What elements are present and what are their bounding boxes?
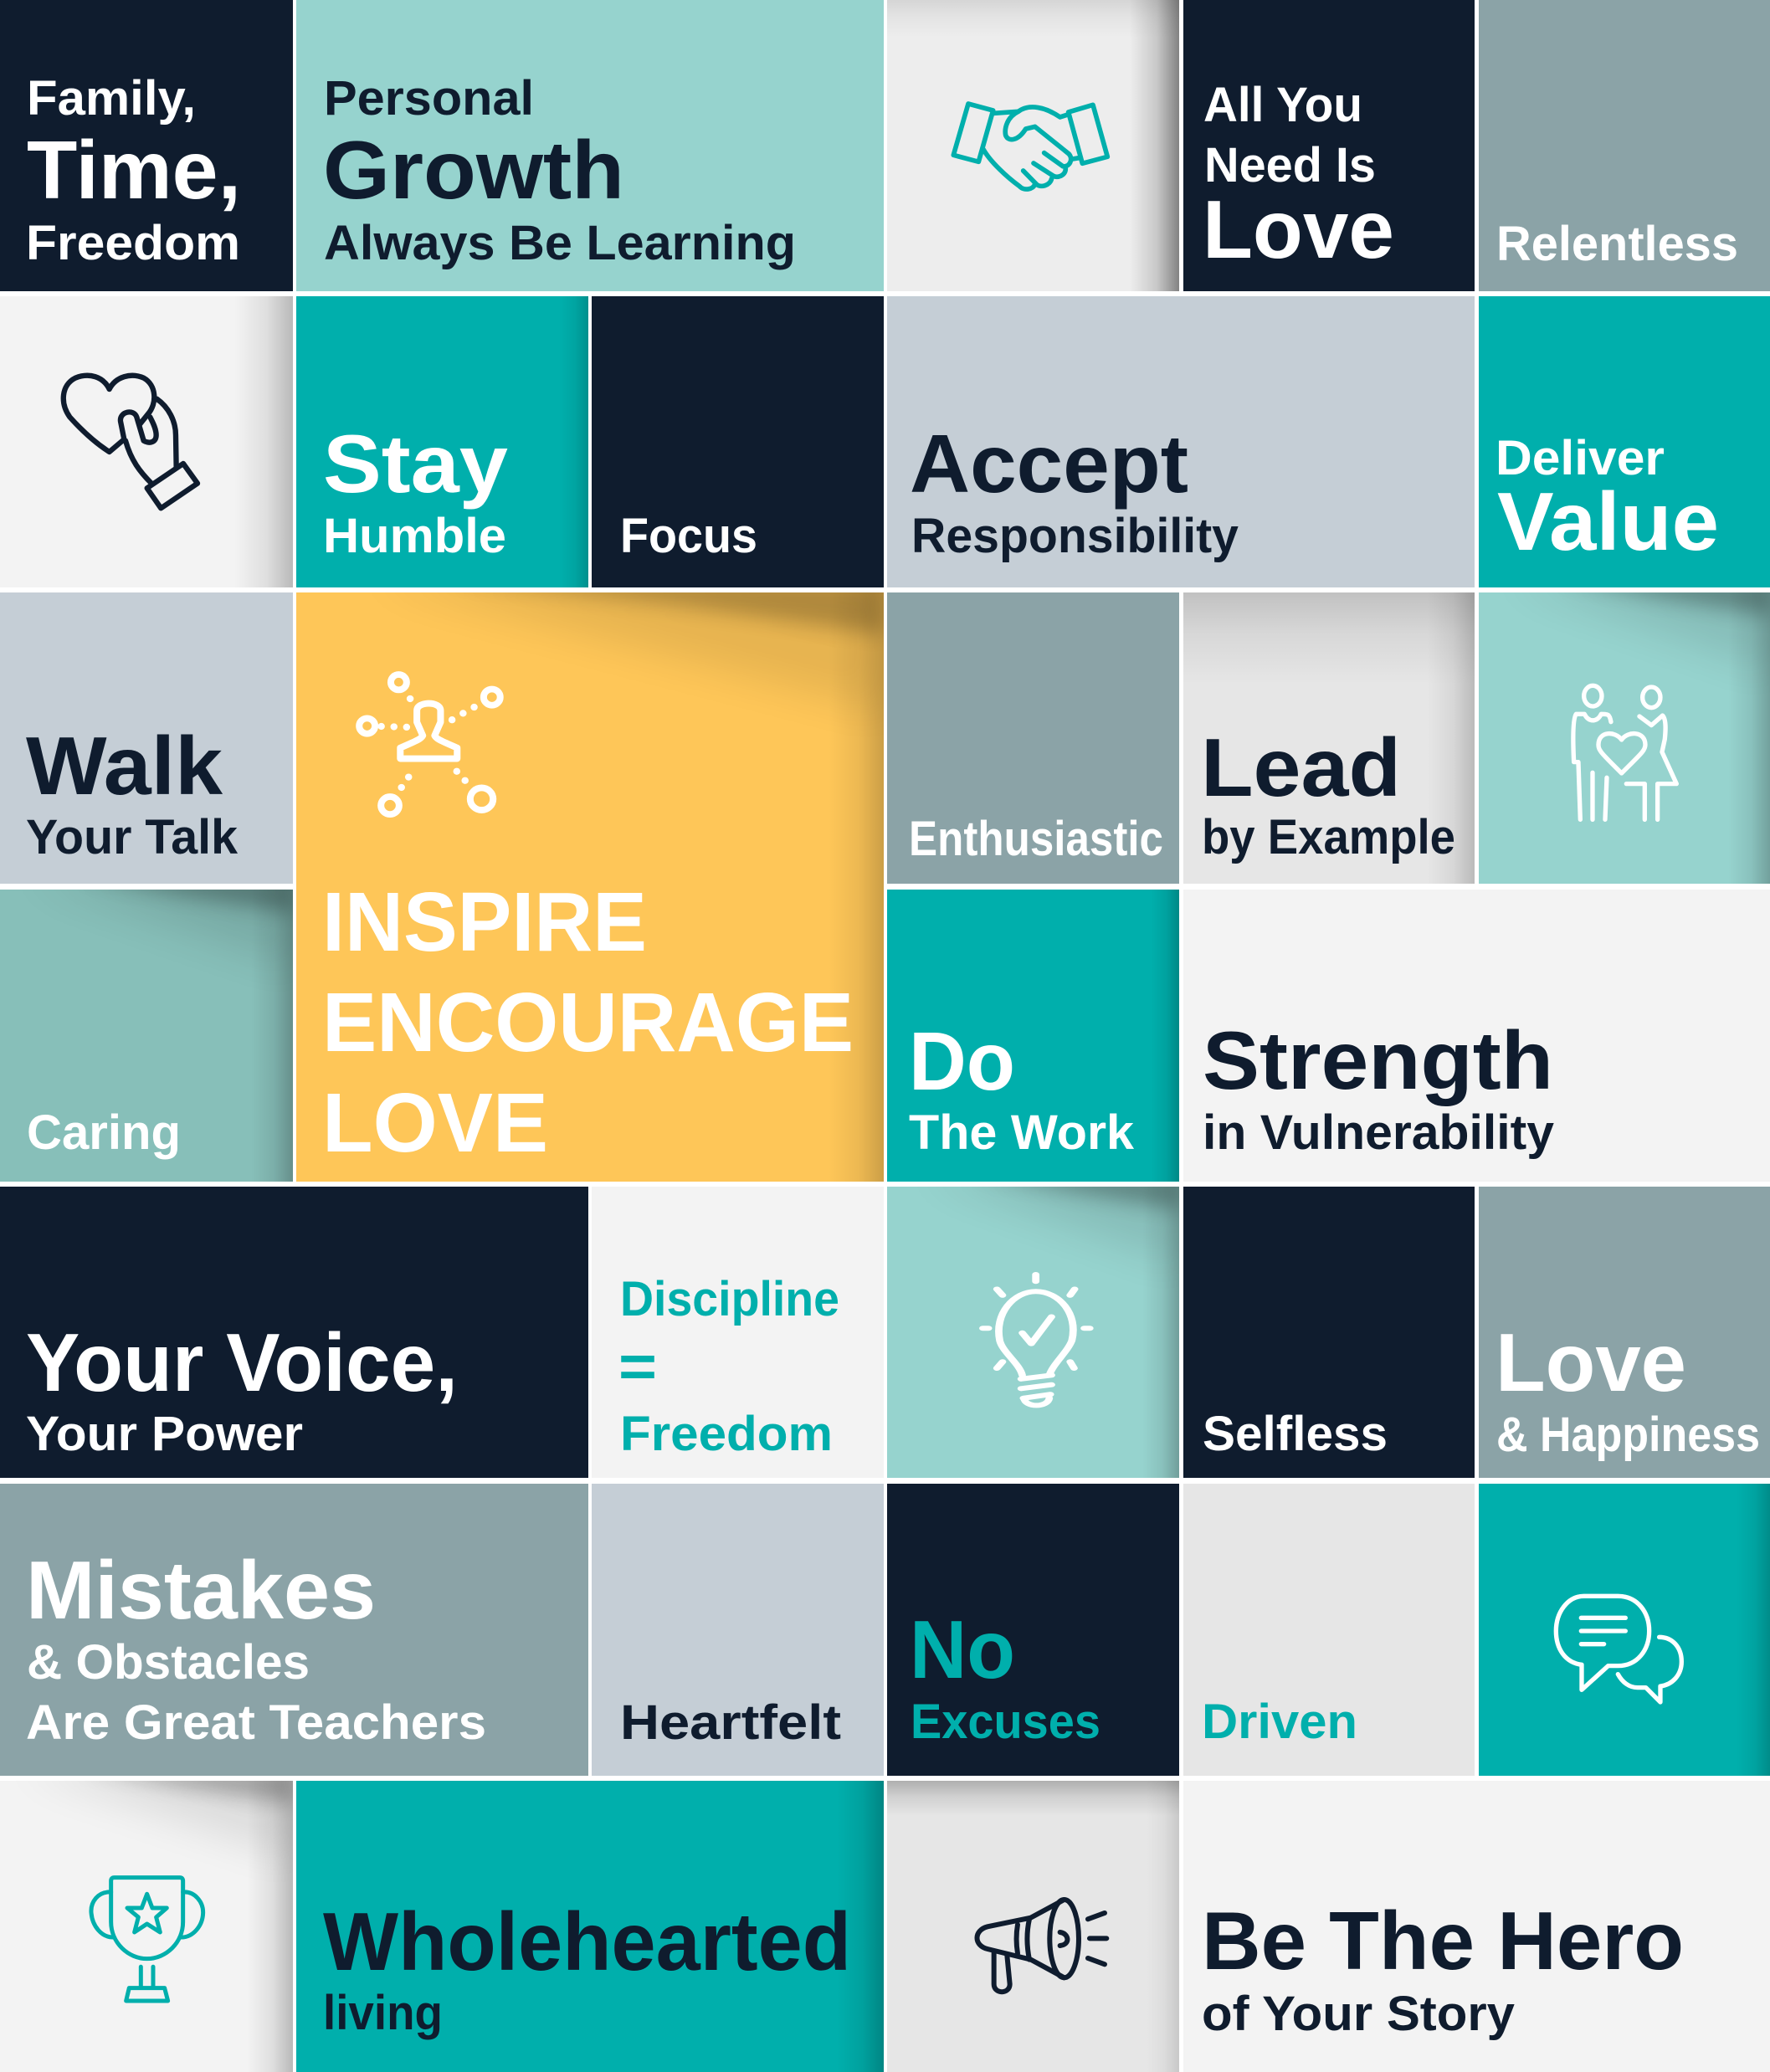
icon: couple with heart [1573,685,1676,819]
panel: Family Time Freedom [0,0,293,291]
text: Accept Responsibility: Responsibility [911,509,1239,563]
text: Lead by Example: Lead [1201,721,1401,813]
text: Walk Your Talk: Your Talk [26,810,239,864]
text: Personal Growth Always Be Learning: Personal [324,71,534,126]
text: Stay Humble: Humble [323,509,506,563]
text: No Excuses: Excuses [911,1695,1100,1749]
panel: Deliver Value [1479,296,1770,587]
icon: light bulb with check [982,1274,1090,1405]
text: Do The Work [909,1015,1135,1160]
panel: Stay Humble [296,296,588,587]
text: Be The Hero of Your Story: Be The Hero [1202,1895,1684,1987]
panel: Do The Work [887,890,1179,1182]
text: Walk Your Talk: Walk [26,720,223,812]
text: INSPIRE ENCOURAGE LOVE: ENCOURAGE [322,976,854,1069]
text: Deliver Value: Value [1497,475,1719,567]
text: Your Voice, Your Power: Your Voice, [26,1316,458,1408]
text: Mistakes & Obstacles Are Great Teachers: Are Great Teachers [26,1695,486,1750]
text: Wholehearted living: Wholehearted [323,1895,851,1987]
text: Family, Time, Freedom: Time, [27,124,241,216]
panel: Mistakes and Obstacles [0,1484,588,1776]
text: Strength in Vulnerability: Strength [1203,1014,1553,1106]
panel: Caring [0,874,293,1182]
text: Love & Happiness: Love [1496,1316,1686,1408]
text: Mistakes & Obstacles Are Great Teachers: Mistakes [26,1544,376,1636]
text: Caring: Caring [27,1105,181,1160]
text: No Excuses: No [910,1603,1015,1695]
text: INSPIRE ENCOURAGE LOVE [322,875,854,1170]
text: Enthusiastic: Enthusiastic [909,812,1163,866]
text: Discipline = Freedom [618,1272,839,1461]
text: Wholehearted living: living [323,1986,443,2040]
panel: All You Need Is Love [1183,0,1475,291]
text: Focus: Focus [620,509,757,563]
text: Walk Your Talk [26,720,239,864]
text: No Excuses [910,1603,1100,1749]
text: Mistakes & Obstacles Are Great Teachers [26,1544,486,1750]
text: Your Voice, Your Power [26,1316,458,1461]
text: Mistakes & Obstacles Are Great Teachers: & Obstacles [27,1635,310,1690]
text: Accept Responsibility: Accept [910,418,1188,510]
text: Family, Time, Freedom: Family, [27,71,196,126]
panel: No Excuses [887,1484,1179,1776]
icon: handshake [953,104,1107,189]
text: Personal Growth Always Be Learning: Always Be Learning [324,216,796,270]
panel: trophy [0,1766,293,2072]
text: Lead by Example: by Example [1202,810,1455,864]
text: Discipline = Freedom: Discipline [620,1272,839,1326]
text: Stay Humble [323,418,508,563]
icon: speech bubbles [1556,1596,1681,1702]
panel: Personal Growth [296,0,884,291]
panel: handshake [887,0,1179,291]
text: Lead by Example [1201,721,1455,864]
text: Personal Growth Always Be Learning [323,71,796,270]
icon: megaphone [977,1900,1106,1992]
panel: Love and Happiness [1479,1187,1770,1478]
text: Your Voice, Your Power: Your Power [26,1407,303,1461]
text: Be The Hero of Your Story [1202,1895,1684,2041]
text: Driven: Driven [1202,1695,1357,1749]
text: Do The Work: The Work [909,1105,1135,1160]
panel: Heartfelt [592,1484,884,1776]
panel: megaphone [887,1781,1179,2072]
panel: Lead by Example [1183,592,1475,884]
icon: person with network dots [359,674,500,814]
text: Family, Time, Freedom: Freedom [26,216,240,270]
text: Deliver Value [1496,431,1719,567]
panel: Be The Hero [1183,1781,1770,2072]
panel: Enthusiastic [887,592,1179,884]
panel: Relentless [1479,0,1770,291]
text: Discipline = Freedom: = [618,1334,657,1400]
text: Personal Growth Always Be Learning: Growth [323,124,624,216]
text: Do The Work: Do [909,1015,1015,1107]
text: Love & Happiness [1496,1316,1760,1462]
text: Be The Hero of Your Story: of Your Story [1202,1987,1515,2041]
panel: Accept Responsibility [887,296,1475,587]
panel: light bulb [887,1172,1179,1478]
text: Accept Responsibility [910,418,1239,563]
panel: Wholehearted living [296,1781,884,2072]
panel: Driven [1183,1484,1475,1776]
text: Heartfelt: Heartfelt [620,1695,841,1750]
text: INSPIRE ENCOURAGE LOVE: INSPIRE [322,875,647,969]
panel: Focus [592,296,884,587]
panel: couple with heart [1479,577,1770,884]
text: INSPIRE ENCOURAGE LOVE: LOVE [322,1076,548,1170]
icon: trophy with star [91,1878,203,2001]
text: Strength in Vulnerability: in Vulnerability [1203,1105,1554,1160]
text: Strength in Vulnerability [1203,1014,1554,1160]
text: Selfless: Selfless [1203,1407,1388,1461]
text: All You Need Is Love: Love [1203,183,1394,275]
panel: speech bubbles [1479,1484,1770,1776]
panel: Your Voice Your Power [0,1187,588,1478]
text: Family, Time, Freedom [26,71,241,270]
text: All You Need Is Love: Need Is [1204,138,1376,192]
panel: Strength in Vulnerability [1183,890,1770,1182]
text: All You Need Is Love [1203,78,1394,275]
text: Deliver Value: Deliver [1496,431,1665,485]
text: Relentless: Relentless [1496,217,1738,271]
text: Discipline = Freedom: Freedom [620,1407,833,1461]
panel: Selfless [1183,1187,1475,1478]
text: All You Need Is Love: All You [1203,78,1362,132]
text: Wholehearted living [323,1895,851,2040]
icon: heart in hand [64,376,198,508]
text: Stay Humble: Stay [323,418,508,510]
panel: Walk Your Talk [0,592,293,884]
panel: Discipline = Freedom [592,1187,884,1478]
panel: heart in hand [0,296,293,587]
panel: Inspire Encourage Love [296,577,884,1182]
